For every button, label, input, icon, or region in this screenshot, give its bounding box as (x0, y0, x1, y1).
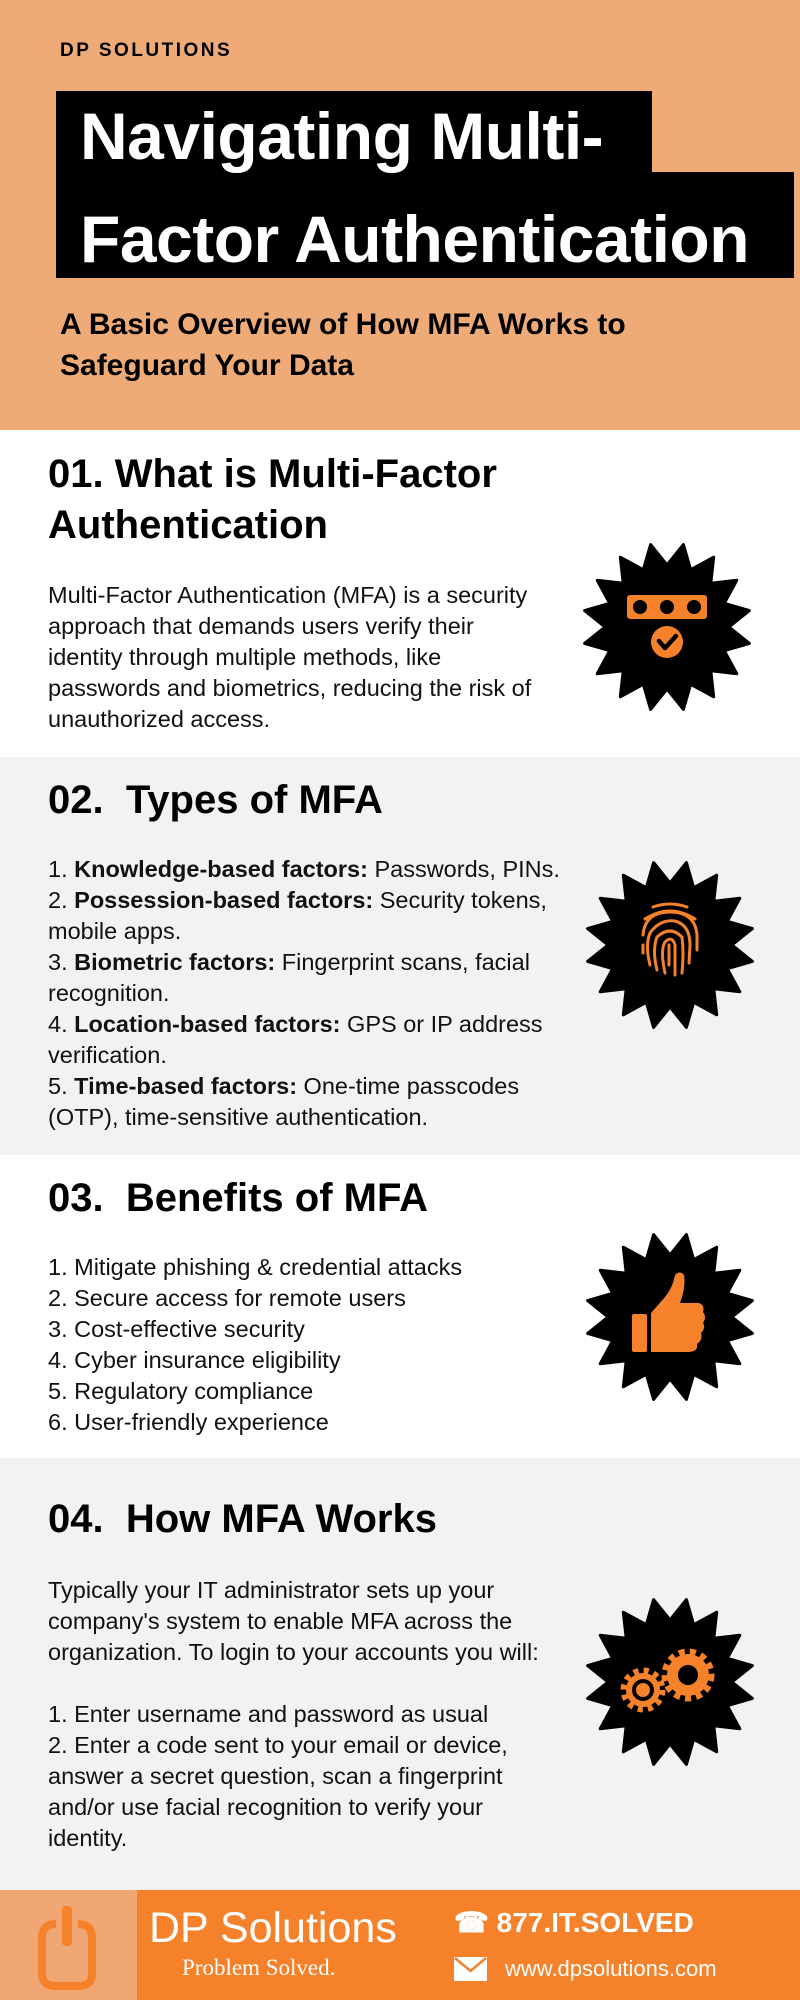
footer (0, 1890, 800, 2000)
list: benefits: 5. Regulatory compliance (48, 1378, 313, 1404)
list: benefits: 2. Secure access for remote users (48, 1285, 406, 1311)
list: factor types: recognition. (48, 980, 170, 1006)
title text (80, 99, 749, 276)
brand name: DP Solutions (149, 1904, 397, 1952)
heading 01: Authentication (48, 503, 328, 547)
panel: types of MFA (0, 757, 800, 1155)
list: benefits (48, 1254, 462, 1435)
icon: power logo (38, 1906, 96, 1990)
text: steps: identity. (48, 1825, 127, 1851)
list: factor types: (OTP), time-sensitive authentication. (48, 1104, 428, 1130)
text: definition: Multi-Factor Authentication (MFA) is a security (48, 582, 527, 608)
icon: envelope (454, 1957, 487, 1981)
text: steps: 2. Enter a code sent to your email or device, (48, 1732, 508, 1758)
brand label: DP SOLUTIONS (60, 40, 232, 61)
panel: benefits (0, 1155, 800, 1458)
text: definition: approach that demands users verify their (48, 613, 474, 639)
text: steps: answer a secret question, scan a fingerprint (48, 1763, 503, 1789)
footer logo block (0, 1890, 137, 2000)
icon: gears (586, 1598, 754, 1766)
header panel (0, 0, 800, 430)
phone: ☎ 877.IT.SOLVED (454, 1907, 694, 1938)
list: factor types: 1. Knowledge-based factors: Passwords, PINs. (48, 856, 560, 882)
panel: what is MFA (0, 430, 800, 757)
tagline: Problem Solved. (182, 1955, 335, 1980)
list: benefits: 1. Mitigate phishing & credential attacks (48, 1254, 462, 1280)
text: steps (48, 1577, 539, 1851)
text: steps: organization. To login to your accounts you will: (48, 1639, 539, 1665)
text: steps: and/or use facial recognition to verify your (48, 1794, 483, 1820)
list: factor types: 5. Time-based factors: One-time passcodes (48, 1073, 519, 1099)
heading 01 (48, 452, 497, 547)
icon: thumbs up (586, 1233, 754, 1401)
heading 03: 03. Benefits of MFA (48, 1176, 428, 1220)
text: steps: 1. Enter username and password as usual (48, 1701, 488, 1727)
title text: Navigating Multi- (80, 99, 603, 173)
list: benefits: 6. User-friendly experience (48, 1409, 329, 1435)
text: definition (48, 582, 532, 732)
subtitle: Safeguard Your Data (60, 349, 354, 382)
title text: Factor Authentication (80, 202, 749, 276)
subtitle: A Basic Overview of How MFA Works to (60, 308, 626, 341)
icon: fingerprint (586, 861, 754, 1029)
text: definition: unauthorized access. (48, 706, 270, 732)
heading 04: 04. How MFA Works (48, 1497, 437, 1541)
list: factor types: 3. Biometric factors: Fingerprint scans, facial (48, 949, 530, 975)
title block (56, 91, 794, 278)
list: factor types: mobile apps. (48, 918, 181, 944)
list: benefits: 4. Cyber insurance eligibility (48, 1347, 341, 1373)
text: definition: passwords and biometrics, reducing the risk of (48, 675, 531, 701)
text: steps: Typically your IT administrator sets up your (48, 1577, 494, 1603)
website: www.dpsolutions.com (505, 1956, 717, 1981)
text: definition: identity through multiple methods, like (48, 644, 441, 670)
subtitle (60, 308, 626, 382)
list: benefits: 3. Cost-effective security (48, 1316, 305, 1342)
heading 01: 01. What is Multi-Factor (48, 452, 497, 496)
icon: password check (583, 543, 751, 711)
list: factor types: 4. Location-based factors: GPS or IP address (48, 1011, 543, 1037)
list: factor types (48, 856, 560, 1130)
text: steps: company's system to enable MFA across the (48, 1608, 512, 1634)
panel: how MFA works (0, 1458, 800, 1890)
list: factor types: verification. (48, 1042, 167, 1068)
list: factor types: 2. Possession-based factors: Security tokens, (48, 887, 547, 913)
heading 02: 02. Types of MFA (48, 778, 383, 822)
